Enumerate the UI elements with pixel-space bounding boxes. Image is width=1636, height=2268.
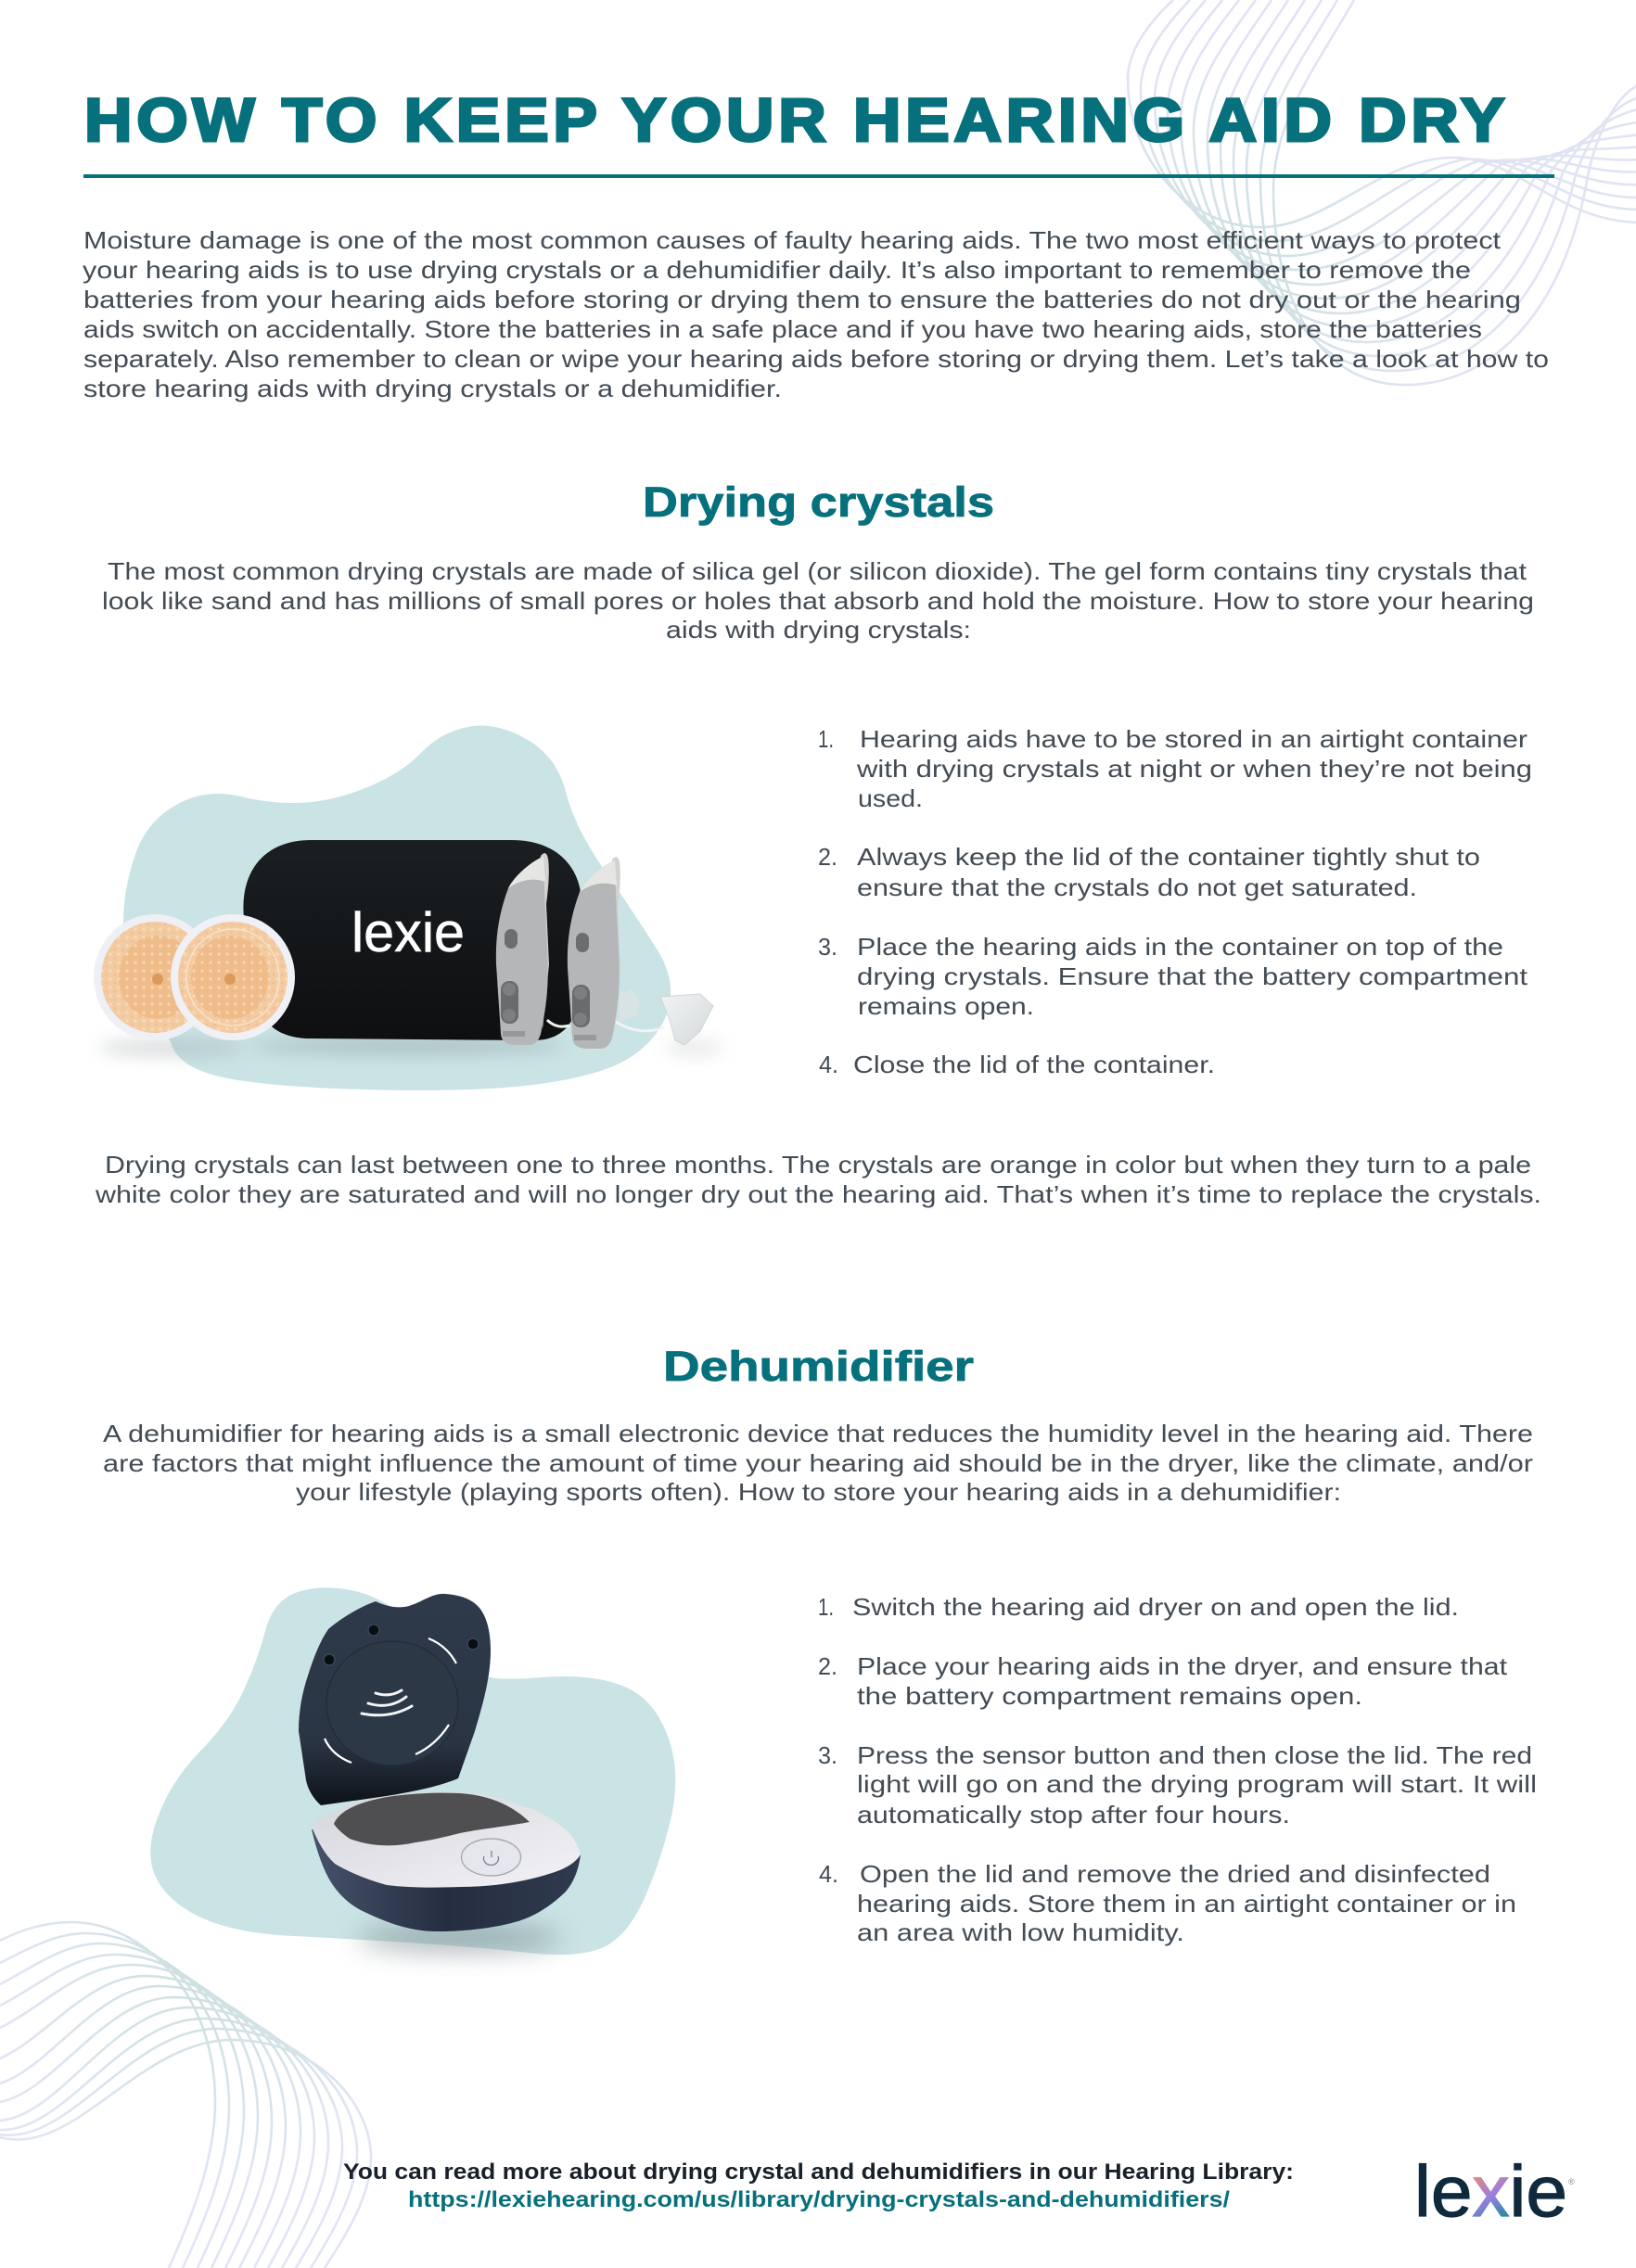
drying crystals steps: with drying crystals at night or when they’re not being [856,755,1532,783]
drying crystals intro text: look like sand and has millions of small pores or holes that absorb and hold the moisture. How to store your hearing [102,587,1534,615]
drying crystals steps: Hearing aids have to be stored in an airtight container [860,725,1527,753]
dehumidifier steps: hearing aids. Store them in an airtight container or in [857,1890,1516,1918]
dehumidifier intro text: your lifestyle (playing sports often). How to store your hearing aids in a dehumidifier: [296,1478,1341,1506]
ear dome back [620,989,640,1022]
decorative wave: bottom left [0,1922,371,2268]
title: HOW TO KEEP YOUR HEARING AID DRY [84,85,1504,154]
logo: lexie: lexie [1414,2150,1567,2232]
footer call to action: https://lexiehearing.com/us/library/drying-crystals-and-dehumidifiers/ [408,2187,1230,2212]
dehumidifier steps: 2. [818,1652,837,1680]
dehumidifier intro text: are factors that might influence the amount of time your hearing aid should be in the dryer, like the climate, and/or [103,1449,1533,1477]
drying crystals intro text [102,557,1534,643]
heading: dehumidifier: Dehumidifier [663,1343,974,1390]
device lid [299,1594,491,1805]
intro paragraph: store hearing aids with drying crystals or a dehumidifier. [83,375,782,402]
device drying chamber [334,1793,530,1845]
dehumidifier steps: 3. [818,1741,837,1769]
footer call to action [343,2160,1294,2212]
dehumidifier steps: 1. [818,1593,834,1621]
title rule [83,174,1554,178]
intro paragraph: Moisture damage is one of the most common causes of faulty hearing aids. The two most efficient ways to protect [83,226,1502,254]
intro paragraph: separately. Also remember to clean or wipe your hearing aids before storing or drying them. Let’s take a look at how to [83,345,1549,373]
drying crystals intro text: aids with drying crystals: [666,616,971,643]
blob background [150,1587,675,1955]
dehumidifier steps: Switch the hearing aid dryer on and open the lid. [852,1593,1459,1621]
drying crystals steps: 1. [818,725,834,753]
shadows [97,1038,723,1055]
case logo: lexie [351,901,465,963]
dehumidifier steps: automatically stop after four hours. [857,1801,1290,1828]
dehumidifier intro text [103,1420,1533,1506]
drying crystals steps: 4. [819,1051,838,1078]
power button [462,1839,521,1876]
logo: lexie: ® [1568,2177,1575,2186]
hearing aid left [496,853,549,1045]
drying crystals steps: 2. [818,843,837,871]
drying crystals steps: Always keep the lid of the container tightly shut to [857,843,1480,871]
dehumidifier steps [818,1593,1537,1946]
drying crystals steps: Close the lid of the container. [853,1051,1215,1078]
dehumidifier steps: an area with low humidity. [857,1918,1184,1946]
intro paragraph [83,226,1549,402]
drying crystals intro text: The most common drying crystals are made of silica gel (or silicon dioxide). The gel form contains tiny crystals that [108,557,1527,585]
storage case [243,840,582,1040]
heading: drying crystals: Drying crystals [643,478,994,526]
drying crystals steps: drying crystals. Ensure that the battery compartment [857,962,1528,990]
drying crystals steps: ensure that the crystals do not get saturated. [857,873,1417,901]
drying crystals closing text [95,1151,1541,1208]
dehumidifier steps: Open the lid and remove the dried and disinfected [860,1860,1490,1888]
crystal disc left [94,914,216,1040]
dehumidifier steps: Press the sensor button and then close the lid. The red [857,1741,1532,1769]
dehumidifier steps: Place your hearing aids in the dryer, and ensure that [857,1652,1508,1680]
drying crystals closing text: white color they are saturated and will no longer dry out the hearing aid. That’s when it’s time to replace the crystals. [95,1180,1541,1208]
intro paragraph: batteries from your hearing aids before storing or drying them to ensure the batteries do not dry out or the hearing [83,286,1521,313]
device shadow [357,1925,561,1951]
intro paragraph: your hearing aids is to use drying crystals or a dehumidifier daily. It’s also important to remember to remove the [83,256,1471,284]
drying crystals closing text: Drying crystals can last between one to three months. The crystals are orange in color but when they turn to a pale [105,1151,1531,1179]
footer call to action: You can read more about drying crystal and dehumidifiers in our Hearing Library: [343,2160,1294,2185]
crystal disc right [171,914,295,1040]
drying crystals steps: 3. [818,933,837,961]
drying crystals steps: remains open. [858,992,1034,1020]
intro paragraph: aids switch on accidentally. Store the batteries in a safe place and if you have two hearing aids, store the batteries [83,315,1482,343]
ear dome front [660,994,713,1045]
illustration: drying crystals and hearing aids [94,726,723,1090]
decorative wave: top right [1128,0,1636,385]
hearing aid wires [547,1020,664,1031]
dehumidifier intro text: A dehumidifier for hearing aids is a small electronic device that reduces the humidity level in the hearing aid. There [103,1420,1533,1447]
dehumidifier steps: 4. [819,1860,838,1888]
dehumidifier steps: the battery compartment remains open. [857,1682,1362,1710]
drying crystals steps [818,725,1532,1078]
blob background [123,726,671,1090]
drying crystals steps: Place the hearing aids in the container on top of the [857,933,1503,961]
dehumidifier steps: light will go on and the drying program will start. It will [857,1770,1537,1798]
drying crystals steps: used. [858,784,923,812]
illustration: dehumidifier [150,1587,675,1955]
hearing aid right [568,857,620,1049]
device base top [312,1792,581,1888]
device base body [312,1829,581,1931]
